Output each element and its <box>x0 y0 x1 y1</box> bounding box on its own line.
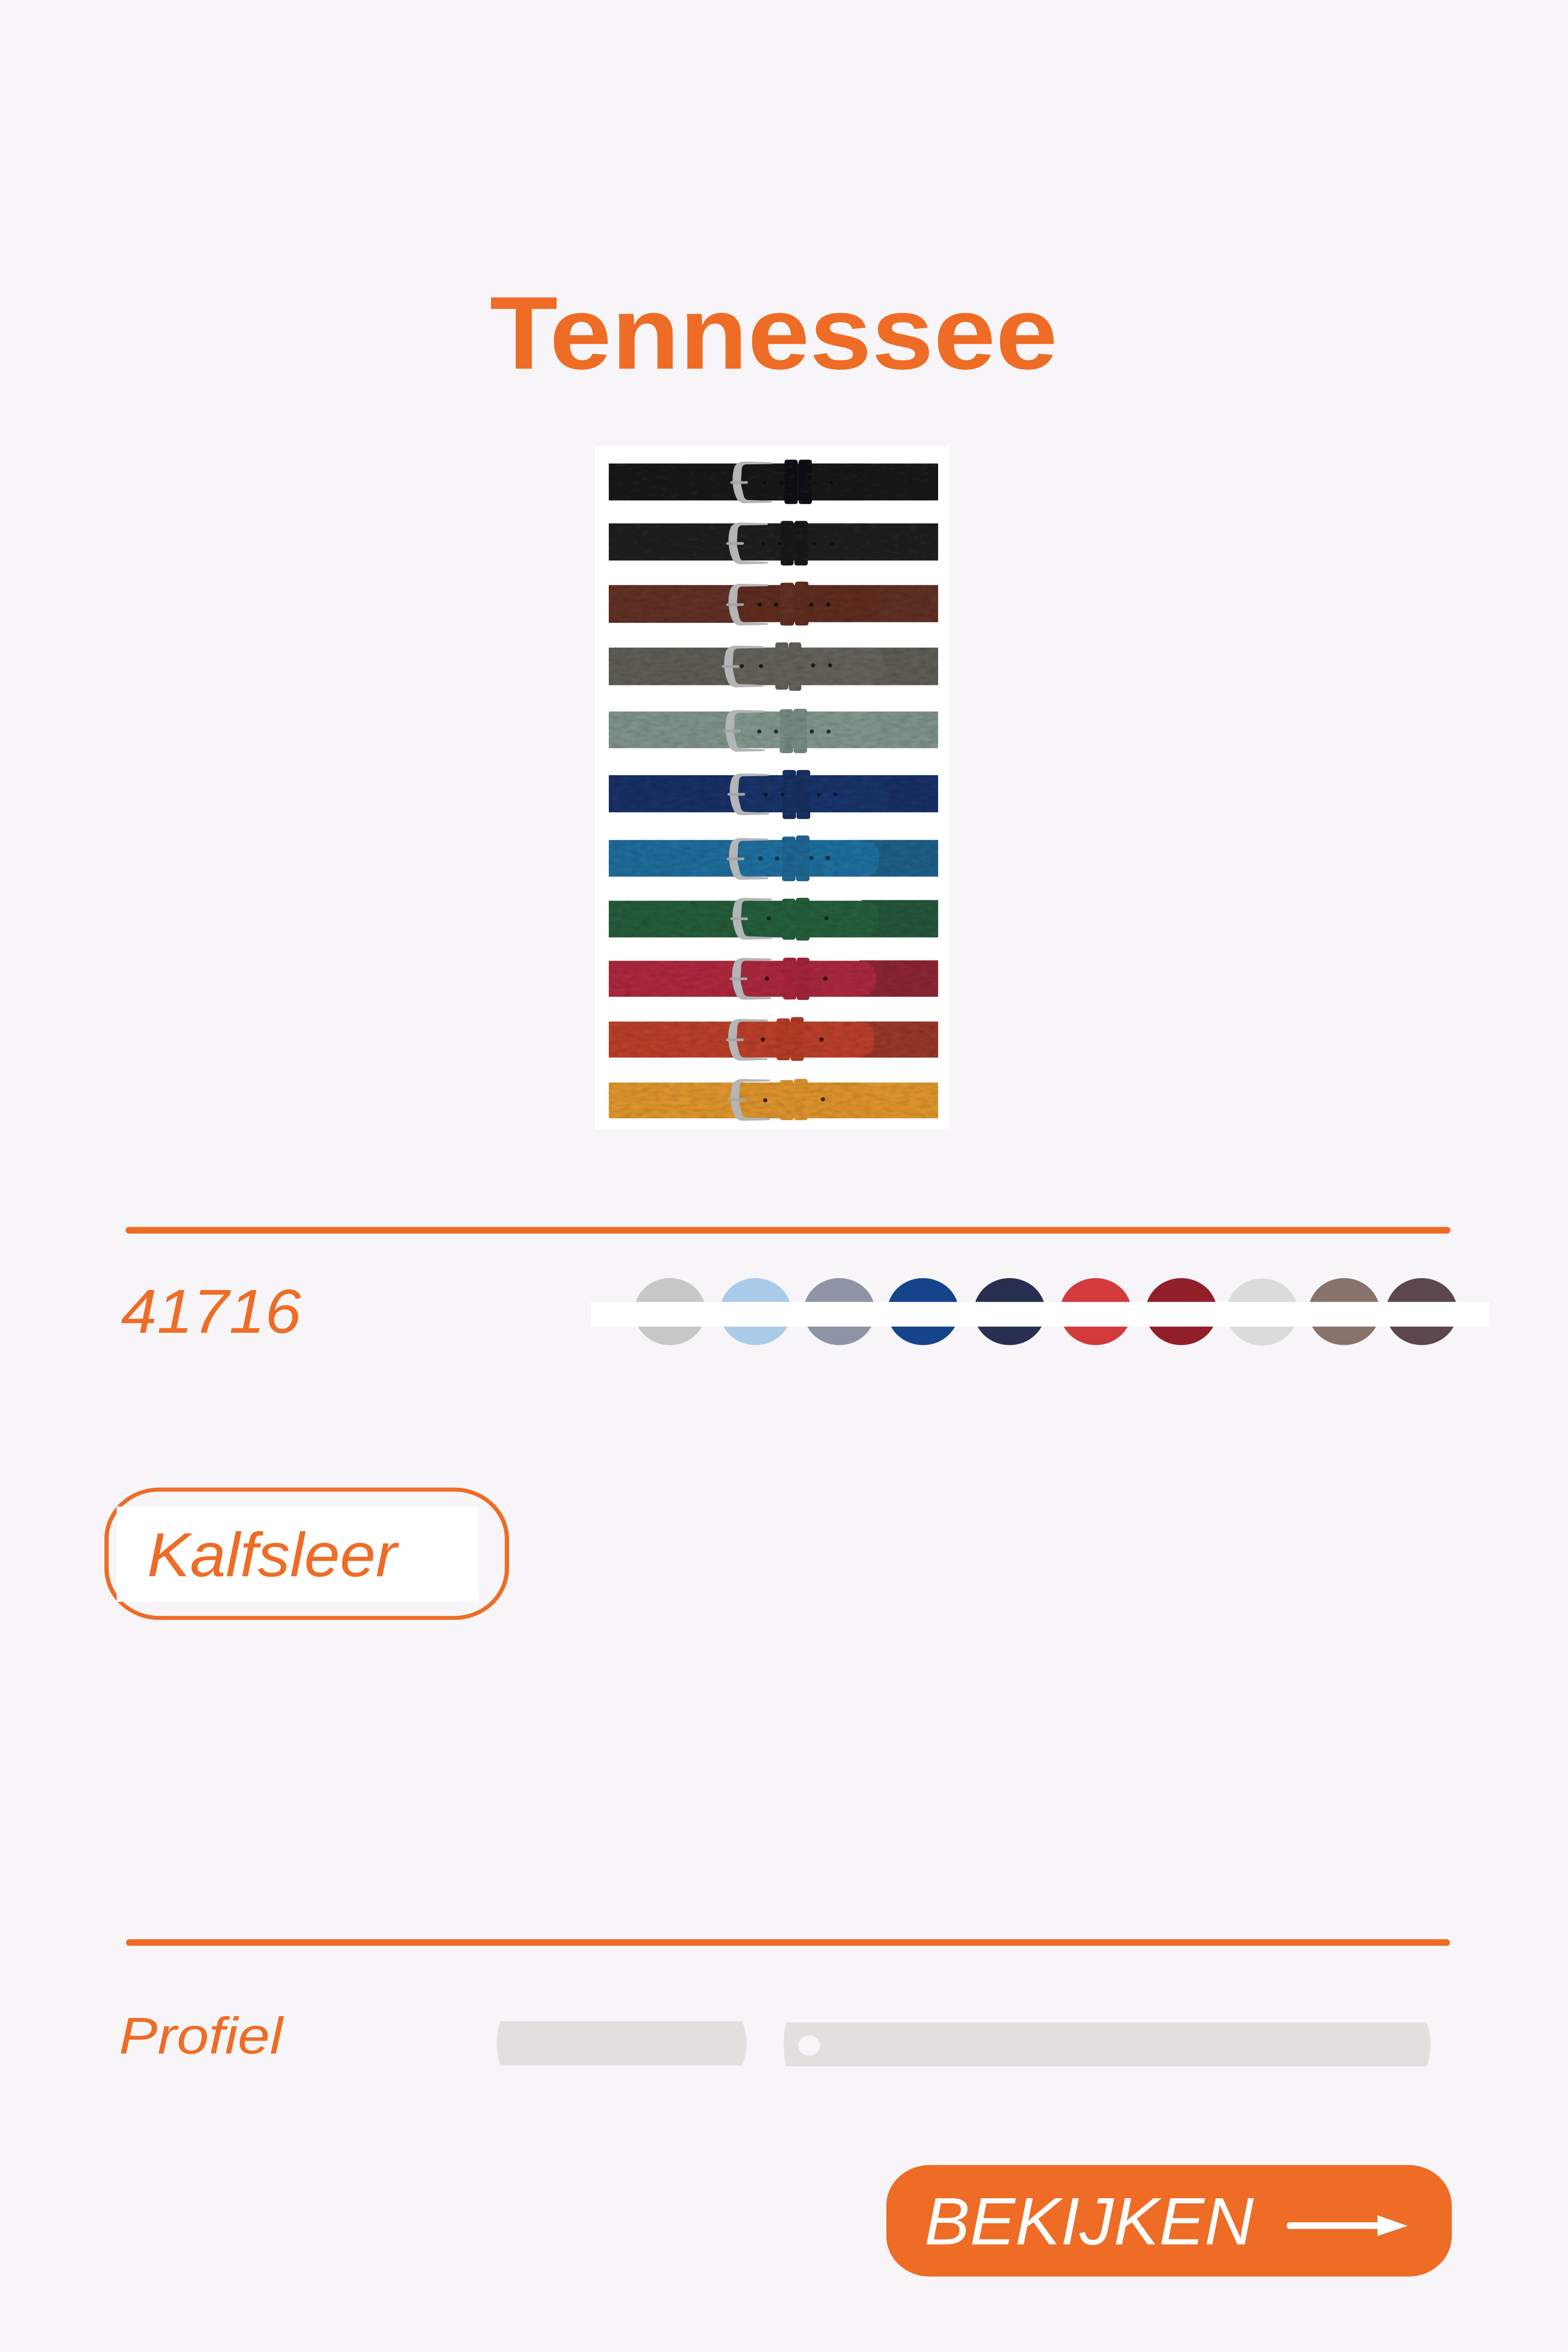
profile shape: short segment <box>497 2021 747 2066</box>
button: Bekijken: BEKIJKEN <box>924 2185 1254 2259</box>
strap: taupe grey <box>609 643 938 691</box>
title: Tennessee <box>490 276 1058 391</box>
material pill: Kalfsleer <box>106 1490 507 1618</box>
panel: product photo of eleven suede straps <box>595 446 950 1129</box>
icon: arrow <box>1287 2215 1408 2236</box>
material pill: Kalfsleer: Kalfsleer <box>147 1520 399 1589</box>
white band over swatches <box>591 1302 1490 1327</box>
strap: forest green <box>609 898 938 940</box>
colour swatches <box>634 1278 1457 1345</box>
strap: charcoal <box>609 521 938 565</box>
profile label: Profiel <box>119 2007 284 2065</box>
divider line top <box>126 1227 1450 1233</box>
profile shape: long segment with hole <box>784 2023 1431 2066</box>
divider line bottom <box>126 1939 1450 1946</box>
strap: navy <box>609 770 938 819</box>
strap: black <box>609 460 938 504</box>
strap: petrol blue <box>609 835 938 881</box>
strap: rust orange <box>609 1017 938 1061</box>
strap: crimson red <box>609 958 938 1000</box>
strap: ochre yellow <box>609 1079 938 1121</box>
strap: brown <box>609 582 938 626</box>
article number: 41716 <box>121 1276 301 1346</box>
strap: sage green <box>609 709 938 753</box>
button: Bekijken <box>886 2165 1452 2277</box>
